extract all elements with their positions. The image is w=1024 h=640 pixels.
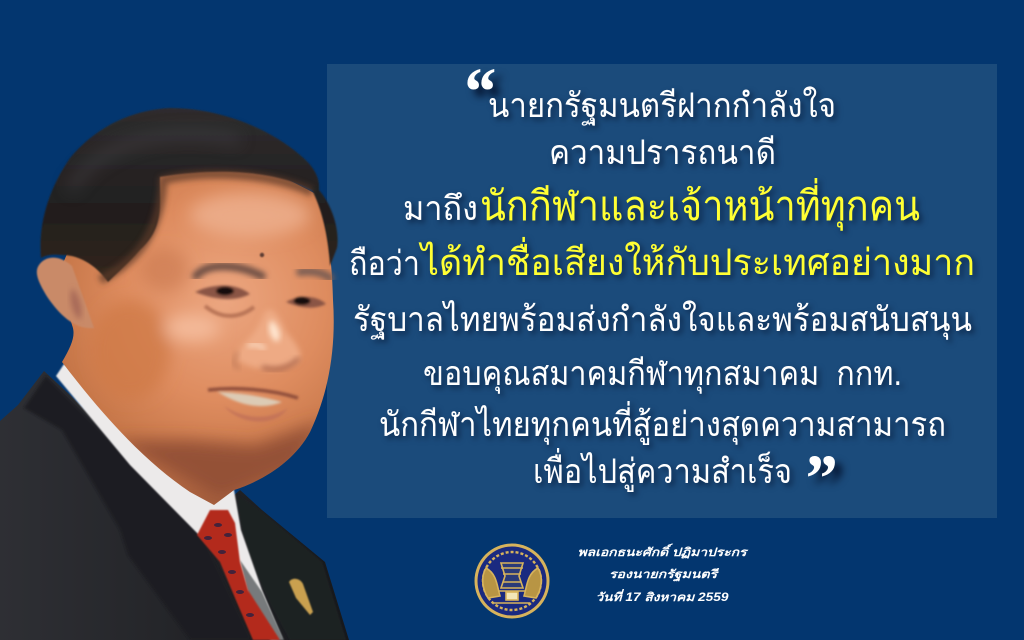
- face shading: [90, 193, 325, 500]
- inner ear: [70, 288, 82, 320]
- seal inner artwork: [483, 552, 541, 610]
- quote line 1: นายกรัฐมนตรีฝากกำลังใจ: [488, 86, 836, 126]
- left eye: [195, 286, 254, 316]
- lapel pin: [289, 579, 313, 615]
- quote line 2: ความปรารถนาดี: [549, 134, 776, 172]
- quote line 5: รัฐบาลไทยพร้อมส่งกำลังใจและพร้อมสนับสนุน: [353, 300, 972, 340]
- hair highlight: [70, 134, 240, 190]
- necktie: [197, 510, 280, 640]
- logo: government seal: [474, 544, 550, 618]
- quote line 7: นักกีฬาไทยทุกคนที่สู้อย่างสุดความสามารถ: [379, 401, 946, 445]
- quote line 6: ขอบคุณสมาคมกีฬาทุกสมาคม กกท.: [423, 355, 902, 394]
- panel: quote background: [327, 64, 997, 518]
- quote line 4: ได้ทำชื่อเสียงให้กับประเทศอย่างมาก: [418, 236, 975, 283]
- nose: [234, 310, 300, 369]
- neck and face: [58, 165, 334, 505]
- quote line 8: เพื่อไปสู่ความสำเร็จ: [533, 448, 792, 492]
- left eyebrow: [196, 266, 262, 276]
- quote line 3: มาถึง: [403, 190, 478, 228]
- ear: [37, 258, 94, 328]
- mole: [260, 253, 264, 257]
- hair: [40, 108, 338, 282]
- quote text block: [349, 53, 975, 516]
- hairline shadow: [100, 174, 312, 280]
- photo: portrait of the deputy prime minister: [0, 108, 349, 640]
- caption title: รองนายกรัฐมนตรี: [609, 568, 719, 582]
- shirt collar: [56, 364, 282, 640]
- quote line 4: ถือว่า: [349, 245, 420, 283]
- caption name: พลเอกธนะศักดิ์ ปฏิมาประกร: [578, 543, 749, 559]
- right lapel: [238, 495, 346, 640]
- suit jacket: [0, 371, 349, 640]
- collar shadow: [240, 560, 284, 640]
- quote line 3: นักกีฬาและเจ้าหน้าที่ทุกคน: [480, 178, 920, 231]
- quote line 3: [403, 178, 920, 231]
- icon: closing quotation mark: ”: [802, 440, 836, 516]
- icon: opening quotation mark: “: [461, 53, 495, 129]
- right eye: [286, 297, 326, 308]
- left lapel: [24, 376, 252, 640]
- mouth: [208, 389, 298, 422]
- caption: name, title and date: [578, 543, 749, 604]
- caption date: วันที่ 17 สิงหาคม 2559: [596, 588, 729, 604]
- tie pattern: [204, 523, 254, 617]
- right eyebrow: [300, 271, 330, 278]
